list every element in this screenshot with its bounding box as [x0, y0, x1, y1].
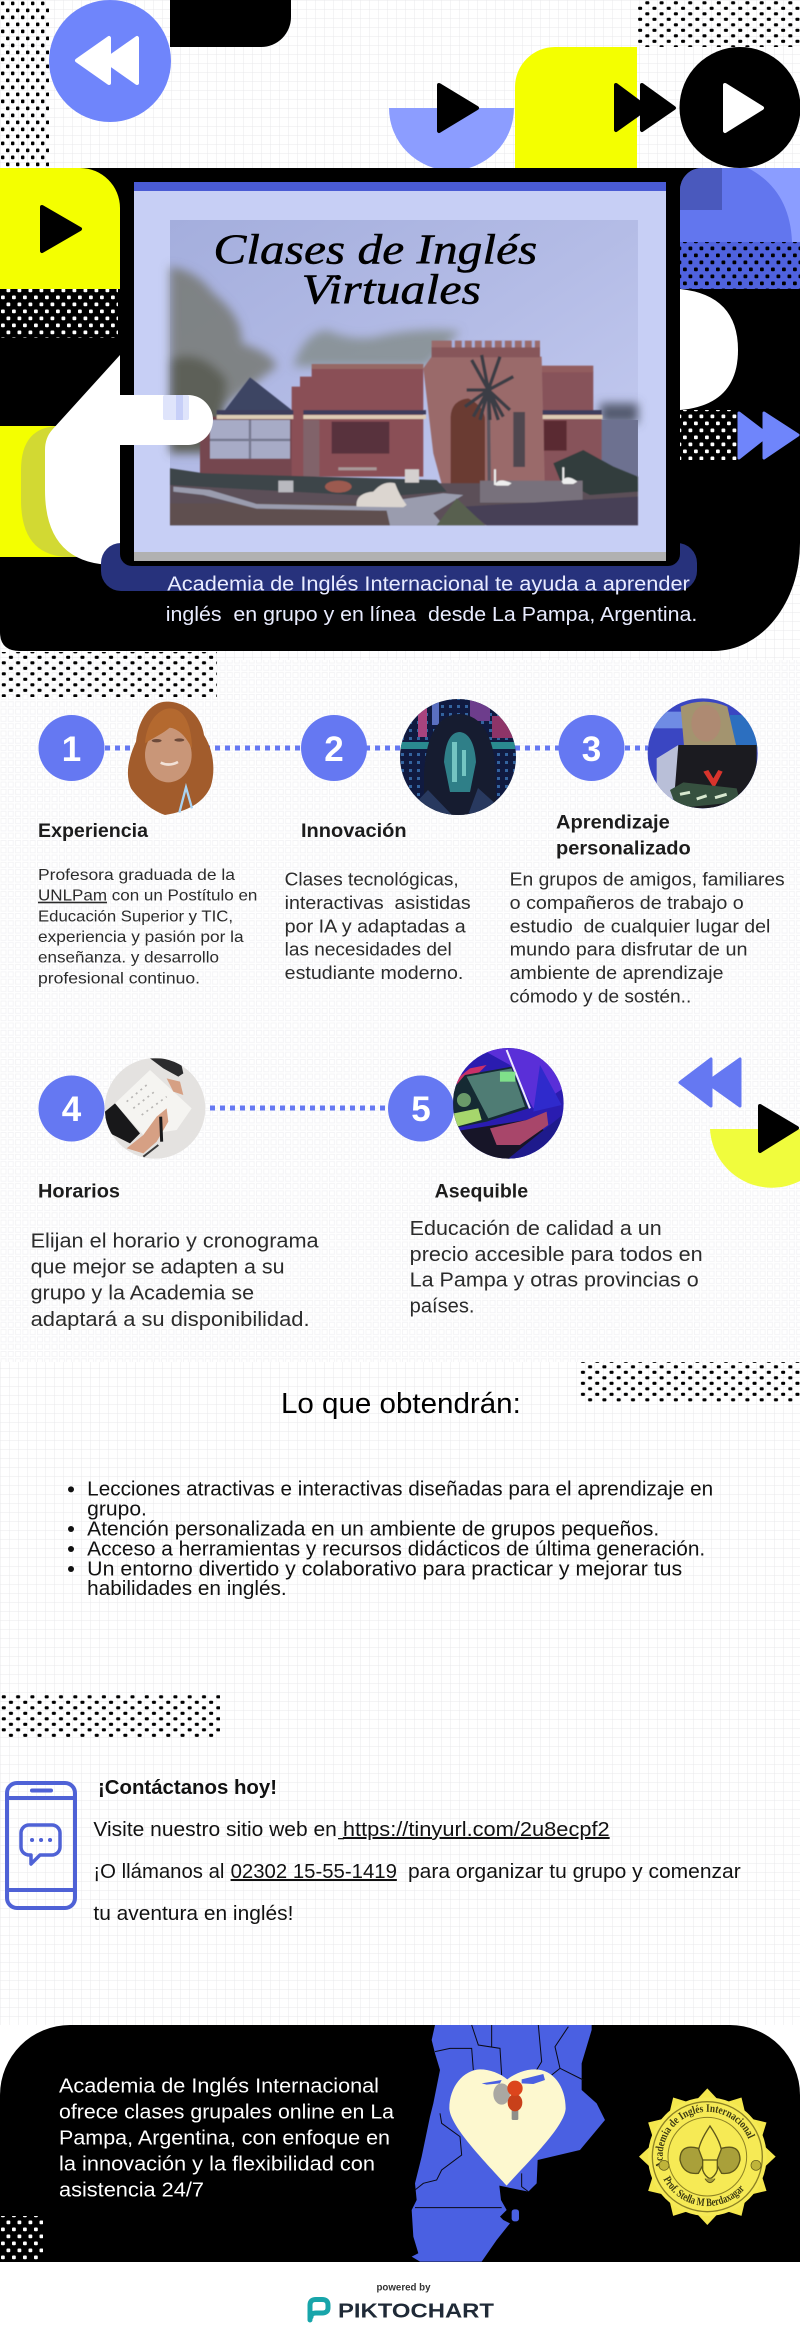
feature: Innovación: interactivas asistidas: [285, 893, 471, 913]
step 3 badge: [558, 715, 624, 781]
feature: Experiencia: UNLPam con un Postítulo en: [38, 888, 257, 905]
feature: Horarios: adaptará a su disponibilidad.: [31, 1309, 310, 1331]
feature: Aprendizaje personalizado: [510, 812, 785, 1006]
benefits list: [68, 1478, 713, 1600]
slide title: [213, 226, 537, 313]
heading: Lo que obtendrán: Lo que obtendrán:: [281, 1388, 521, 1420]
contact text: Visite nuestro sitio web en: [93, 1819, 337, 1841]
feature: Innovación: [285, 821, 471, 983]
footer: powered by Piktochart: powered by: [376, 2282, 431, 2294]
contact text: 02302 15-55-1419: [231, 1861, 397, 1883]
deco: right icons: [680, 1059, 800, 1188]
feature: Innovación: las necesidades del: [285, 940, 452, 960]
feature: Aprendizaje personalizado: o compañeros de trabajo o: [510, 893, 744, 913]
banner text: la innovación y la flexibilidad con: [59, 2153, 375, 2176]
timeline row 2: [38, 1048, 567, 1160]
benefits list: Atención personalizada en un ambiente de grupos pequeños.: [87, 1518, 659, 1540]
feature: Innovación: Innovación: [301, 821, 407, 842]
slide title: Virtuales: [302, 266, 481, 313]
feature: Aprendizaje personalizado: estudio de cualquier lugar del: [510, 916, 770, 936]
feature: Asequible: Asequible: [435, 1182, 528, 1203]
feature: Experiencia: [38, 821, 257, 987]
icon: fast forward blue: [739, 413, 798, 458]
feature: Aprendizaje personalizado: personalizado: [556, 839, 691, 860]
photo: brick house: [170, 220, 638, 525]
feature: Asequible: La Pampa y otras provincias o: [410, 1270, 699, 1292]
feature: Aprendizaje personalizado: En grupos de amigos, familiares: [510, 869, 785, 889]
image: planner and hands: [105, 1058, 205, 1159]
panel: footer banner: [0, 2024, 800, 2262]
icon: phone with chat bubble: [7, 1783, 75, 1908]
panel: hero: [0, 168, 800, 651]
step 3 badge: 3: [582, 730, 601, 769]
contact text: para organizar tu grupo y comenzar: [408, 1861, 741, 1883]
banner text: ofrece clases grupales online en La: [59, 2101, 395, 2124]
feature: Aprendizaje personalizado: cómodo y de sostén..: [510, 986, 691, 1006]
black frame: [120, 168, 680, 566]
top decorative band: [0, 0, 800, 170]
navy band: [101, 543, 697, 591]
image: laptop in neon light: [453, 1048, 567, 1160]
feature: Innovación: por IA y adaptadas a: [285, 916, 467, 936]
icon: fast forward black: [616, 85, 674, 130]
contact text: tu aventura en inglés!: [93, 1903, 293, 1925]
feature: Horarios: que mejor se adapten a su: [31, 1256, 285, 1278]
feature: Horarios: [31, 1182, 320, 1331]
feature: Asequible: Educación de calidad a un: [410, 1218, 662, 1240]
logo: academy seal: [639, 2088, 776, 2225]
map: Argentina with heart and pin: [412, 2025, 605, 2262]
footer: powered by Piktochart: PIKTOCHART: [338, 2300, 494, 2322]
step 5 badge: 5: [411, 1090, 431, 1129]
contact text: ¡Contáctanos hoy!: [98, 1777, 277, 1799]
feature: Experiencia: enseñanza. y desarrollo: [38, 950, 219, 967]
feature: Innovación: estudiante moderno.: [285, 963, 463, 983]
benefits list: grupo.: [87, 1498, 147, 1520]
timeline row 1: [38, 698, 760, 815]
banner text: Academia de Inglés Internacional: [59, 2075, 379, 2098]
feature: Asequible: [410, 1182, 703, 1317]
feature: Experiencia: experiencia y pasión por la: [38, 929, 244, 946]
feature: Experiencia: Educación Superior y TIC,: [38, 908, 233, 925]
step 1 badge: [38, 715, 104, 781]
hero text: inglés en grupo y en línea desde La Pampa, Argentina.: [166, 604, 697, 626]
feature: Aprendizaje personalizado: ambiente de aprendizaje: [510, 963, 724, 983]
feature: Horarios: grupo y la Academia se: [31, 1283, 254, 1305]
logo: academy seal: Prof. Stella M Berdaxagar: [663, 2175, 744, 2206]
feature: Experiencia: profesional continuo.: [38, 970, 200, 987]
banner text: asistencia 24/7: [59, 2179, 204, 2202]
step 5 badge: [388, 1076, 454, 1142]
right blue corner: [680, 168, 800, 289]
icon: play on yellow: [42, 207, 80, 251]
feature: Aprendizaje personalizado: Aprendizaje: [556, 812, 670, 834]
portrait: teacher: [128, 702, 213, 815]
feature: Experiencia: Experiencia: [38, 821, 148, 842]
feature: Experiencia: Profesora graduada de la: [38, 867, 235, 884]
contact text: ¡O llámanos al: [93, 1861, 224, 1883]
logo: academy seal: Academia de Inglés Internacional: [655, 2104, 756, 2166]
hero text: Academia de Inglés Internacional te ayuda a aprender: [167, 574, 690, 596]
footer: powered by Piktochart: [0, 2262, 800, 2342]
feature: Horarios: Elijan el horario y cronograma: [31, 1231, 320, 1253]
white tab: [120, 395, 213, 445]
step 1 badge: 1: [62, 730, 81, 769]
banner text: Pampa, Argentina, con enfoque en: [59, 2127, 390, 2150]
icon: play in black circle: [680, 47, 800, 168]
step 2 badge: 2: [324, 730, 344, 769]
benefits list: Lecciones atractivas e interactivas diseñadas para el aprendizaje en: [87, 1478, 713, 1500]
step 4 badge: 4: [62, 1090, 82, 1129]
feature: Aprendizaje personalizado: mundo para disfrutar de un: [510, 940, 748, 960]
step 2 badge: [301, 715, 367, 781]
feature: Asequible: precio accesible para todos en: [410, 1244, 703, 1266]
benefits list: habilidades en inglés.: [87, 1578, 287, 1600]
hero text: [166, 574, 697, 626]
feature: Horarios: Horarios: [38, 1182, 120, 1203]
image: student in hoodie: [647, 698, 760, 808]
icon: rewind in blue circle: [49, 0, 171, 122]
banner text: [59, 2075, 395, 2202]
benefits list: Un entorno divertido y colaborativo para practicar y mejorar tus: [87, 1558, 682, 1580]
slide title: Clases de Inglés: [213, 226, 537, 273]
feature: Asequible: países.: [410, 1295, 474, 1317]
image: hooded person and data: [400, 699, 516, 815]
feature: Innovación: Clases tecnológicas,: [285, 869, 459, 889]
slide image frame: [134, 182, 666, 561]
benefits list: Acceso a herramientas y recursos didácticos de última generación.: [87, 1538, 705, 1560]
contact text: [93, 1777, 741, 1925]
step 4 badge: [38, 1076, 104, 1142]
icon: Piktochart logo: [310, 2300, 328, 2320]
icon: play black: [439, 85, 477, 131]
contact text: https://tinyurl.com/2u8ecpf2: [343, 1819, 610, 1841]
